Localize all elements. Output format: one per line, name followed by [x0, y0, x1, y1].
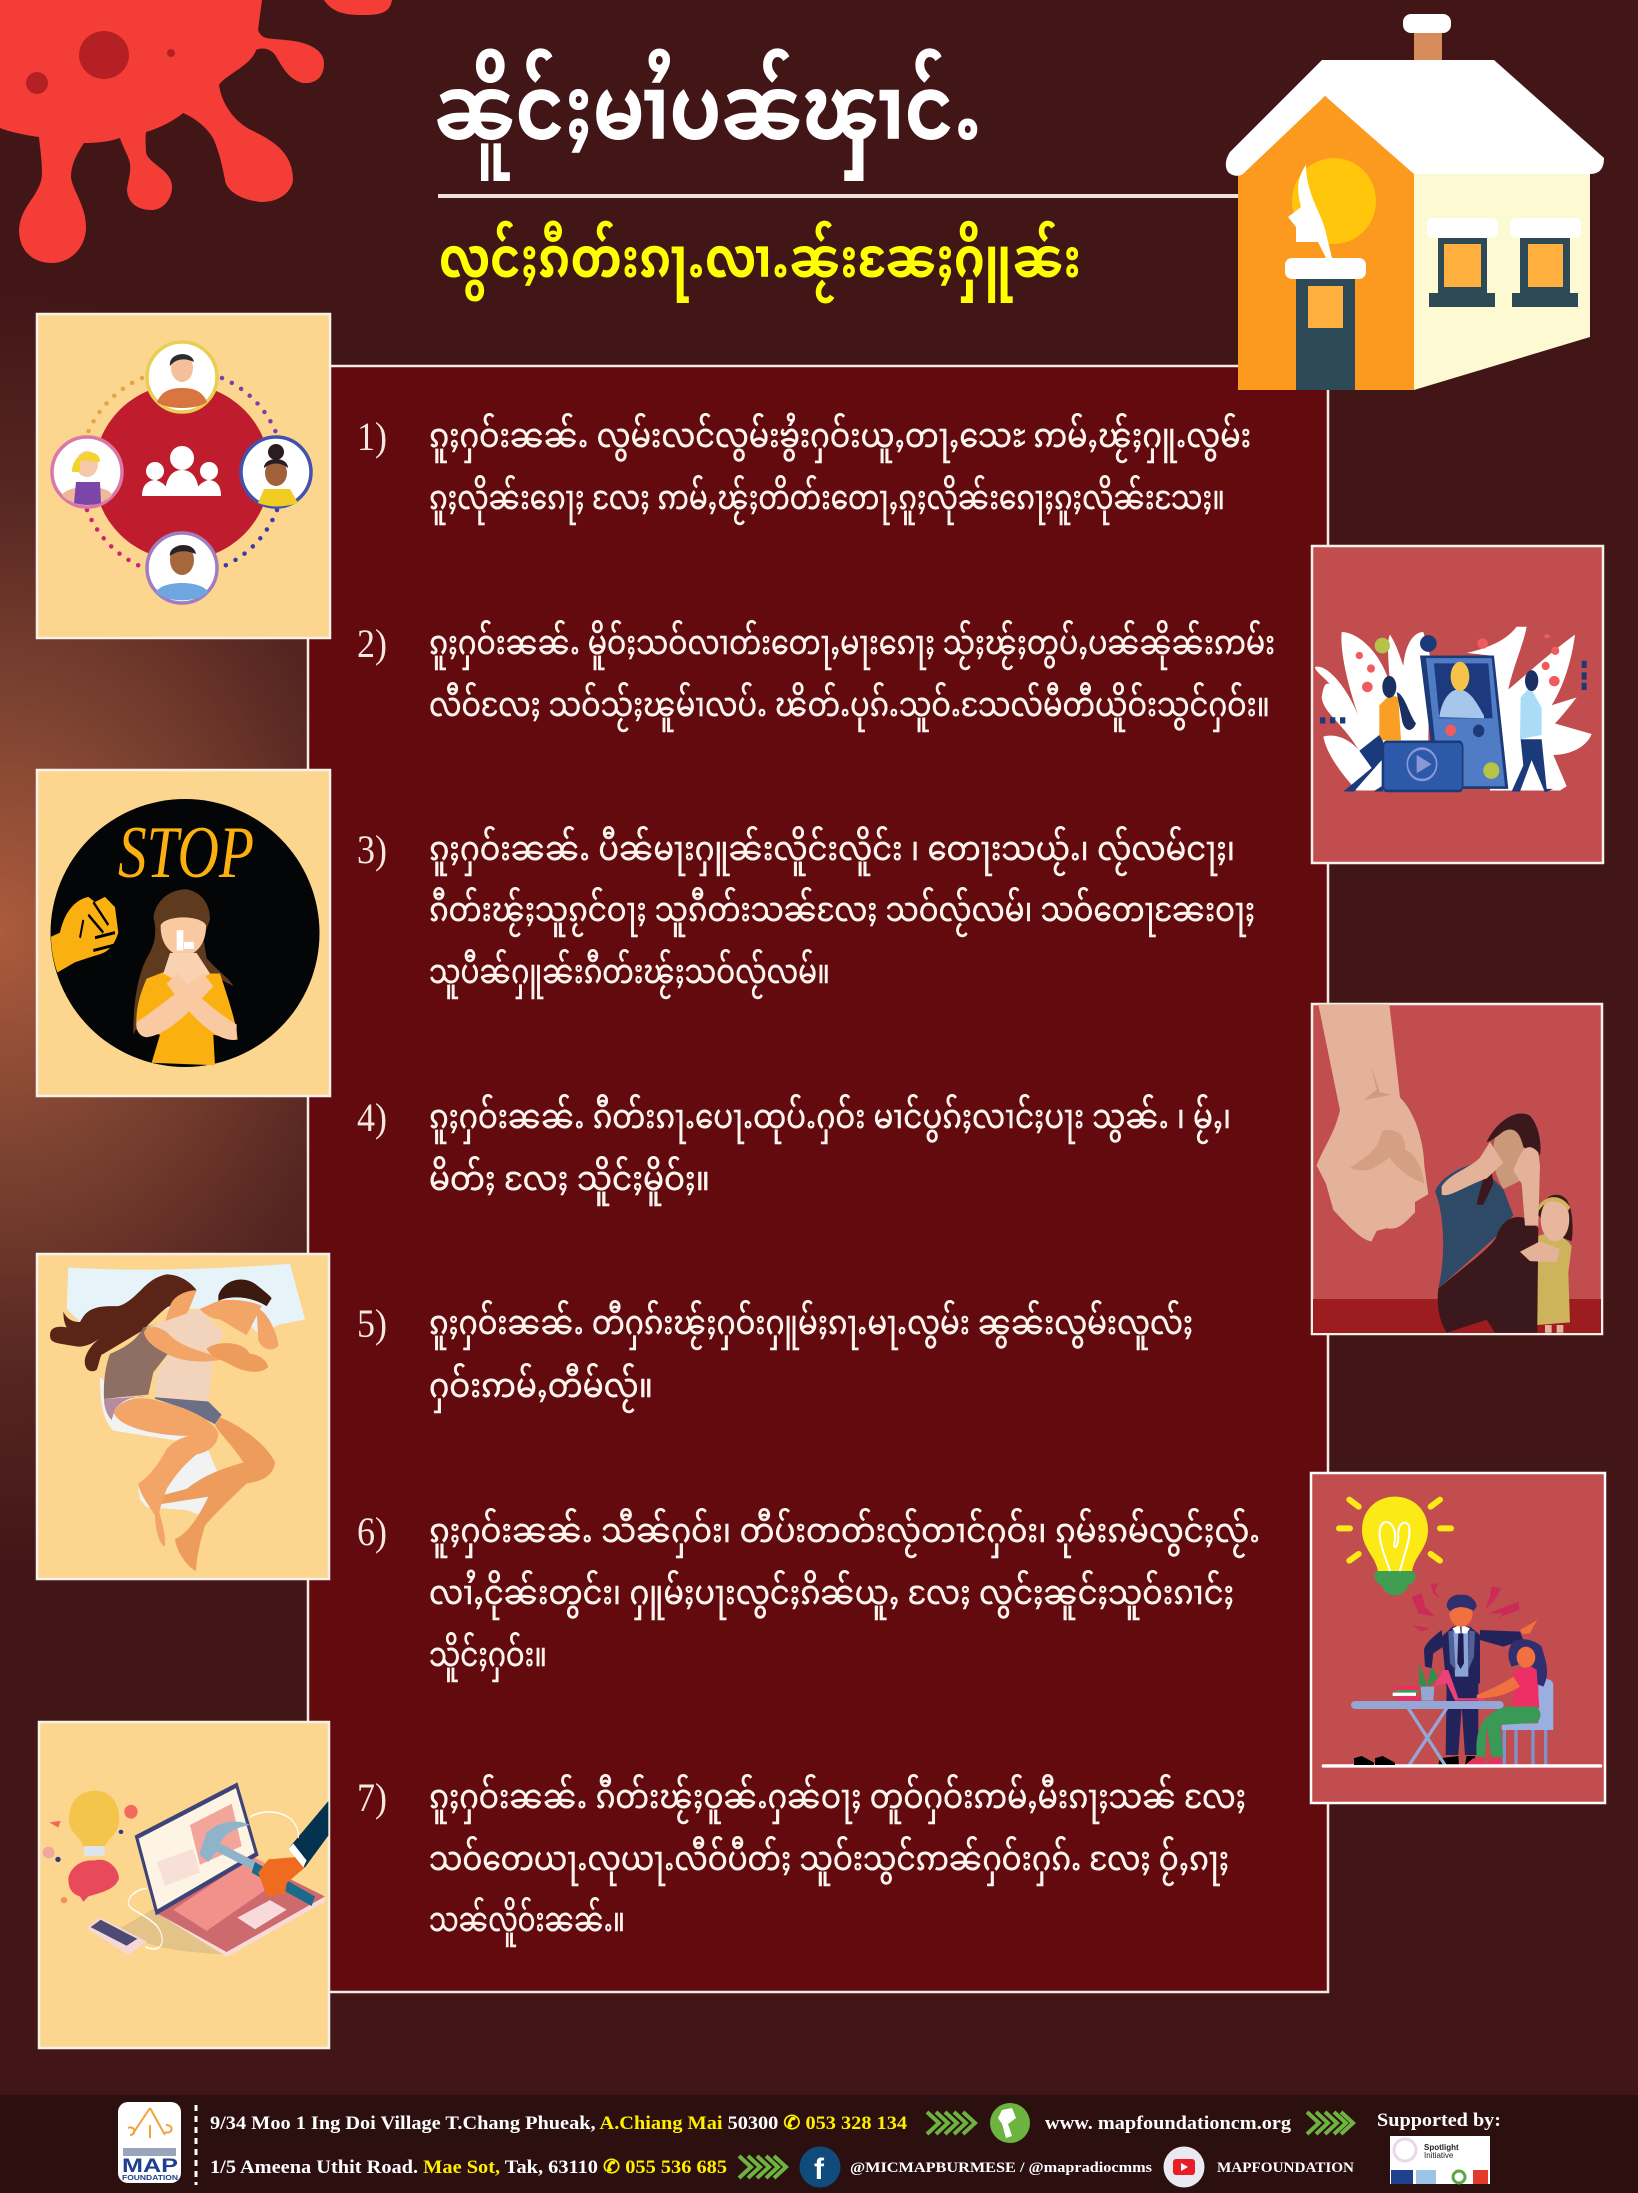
- step 7 text: ၵူႈႁဝ်းၼၼ်ႉ ၵီတ်းၽႂ်ႈဝူၼ်ႉႁၼ်ဝႃႈ တူဝ်ႁဝ်းဢမ်ႇမီးၵႃႈသၼ် လႄႈ: [429, 1772, 1246, 1824]
- step 2 text: ၵူႈႁဝ်းၼၼ်ႉ မိူဝ်ႈသဝ်လၢတ်းတေႃႇမႃးၵေႃႈ သႂ်ႈၽႂ်ႈတွပ်ႇပၼ်ၼိုၼ်းဢမ်း: [429, 618, 1275, 670]
- spotlight initiative logo: Initiative: [1424, 2151, 1454, 2160]
- icon: fist: [51, 897, 118, 972]
- video tablet: [1383, 742, 1463, 791]
- avatar top: [147, 342, 217, 412]
- man shirt: [147, 1309, 223, 1401]
- dotted ring: [87, 378, 277, 567]
- shoes: [1354, 1756, 1395, 1765]
- step 2 text: [357, 618, 1275, 732]
- reaction bubbles: [1320, 634, 1587, 724]
- icon: youtube: [1164, 2146, 1204, 2188]
- icon: globe: [990, 2103, 1030, 2143]
- laptop base: [157, 1854, 325, 1955]
- step 2 text: လီဝ်လႄႈ သဝ်သႂ်ႈၽူမ်ၢလပ်ႉ ၽိတ်ႉပုၵ်ႉသူဝ်ႉသႄလ်မီတီယိူဝ်းသွင်ႁဝ်း။: [429, 680, 1270, 732]
- step 6 text: လၢႆႇငိုၼ်းတွင်း၊ ႁူမ်ႈပႃးလွင်ႈၵိၼ်ယူႇ လႄႈ လွင်ႈၼူင်ႈသူဝ်းၵၢင်ႈ: [429, 1568, 1234, 1620]
- chevrons 1: [927, 2112, 975, 2134]
- panel: people circle illustration: [37, 314, 330, 638]
- bed sheet: [100, 1378, 220, 1531]
- woman arm: [144, 1327, 223, 1361]
- icon: facebook: [800, 2146, 840, 2188]
- panel: hammer on laptop illustration: [39, 1722, 329, 2048]
- youtube name: MAPFOUNDATION: [1217, 2160, 1354, 2176]
- MAP foundation logo: MAP: [122, 2156, 178, 2177]
- man head: [200, 1300, 262, 1335]
- lightning marks: [1412, 1583, 1519, 1632]
- laptop shadow: [120, 1907, 227, 1955]
- man arm: [207, 1343, 268, 1372]
- charging cable: [128, 1812, 298, 1949]
- chevrons 3: [739, 2156, 786, 2178]
- white leaves: [1315, 627, 1592, 790]
- icon: raised fist: [1317, 1004, 1428, 1241]
- address line 2: 1/5 Ameena Uthit Road. Mae Sot, Tak, 63110 ✆ 055 536 685: [210, 2157, 727, 2178]
- icon: lightbulb: [1339, 1497, 1451, 1595]
- left window: [1427, 218, 1498, 307]
- laptop screen: [137, 1785, 257, 1912]
- panel: main text panel: [308, 366, 1328, 1992]
- footer band: [0, 2095, 1638, 2193]
- avatar left: [52, 437, 122, 507]
- step 4 text: [357, 1092, 1231, 1206]
- step 5 text: ႁဝ်းဢမ်ႇတီမ်လႂ်။: [429, 1361, 653, 1413]
- step 2 text: 2): [357, 621, 387, 666]
- panel: fist and frightened family illustration: [1312, 1004, 1602, 1334]
- panel: social media illustration: [1312, 546, 1603, 863]
- step 1 text: 1): [357, 414, 387, 459]
- woman face: [165, 1290, 197, 1322]
- books: [1393, 1686, 1420, 1701]
- step 1 text: ၵူႈႁဝ်းၼၼ်ႉ လွမ်းလင်လွမ်းၶွႆးႁဝ်းယူႇတႃႇသေႊ ဢမ်ႇၽႂ်ႈႁူႉလွမ်း: [429, 411, 1251, 463]
- floor line: [1322, 1764, 1602, 1768]
- supported by: Supported by:: [1377, 2110, 1501, 2131]
- MAP foundation logo: FOUNDATION: [122, 2175, 178, 2182]
- phone: [1420, 656, 1508, 789]
- icon: lightbulb: [69, 1791, 119, 1856]
- laptop: [1433, 1670, 1485, 1701]
- spotlight initiative logo: [1390, 2136, 1490, 2184]
- panel: stop violence illustration: [37, 770, 330, 1096]
- avatar bottom: [147, 533, 217, 603]
- chevrons 2: [1307, 2112, 1353, 2134]
- woman profile: [1288, 165, 1332, 258]
- panel: couple in bed illustration: [37, 1254, 329, 1579]
- MAP foundation logo: [118, 2102, 181, 2183]
- virus splat decoration: [0, 0, 392, 263]
- step 3 text: ၵူႈႁဝ်းၼၼ်ႉ ပီၼ်မႃးႁူၼ်းလိူင်းလိူင်း ၊ တေႃးသယႂ်ႉ၊ လႂ်လမ်ငႃႈ၊: [429, 824, 1235, 876]
- step 7 text: သဝ်တေယႃႉလုယႃႉလီဝ်ပီတ်ႈ သူဝ်းသွင်ဢၼ်ႁဝ်းႁၵ်ႉ လႄႈ ဝႂ်ႇၵႃႈ: [429, 1834, 1229, 1886]
- man shorts: [155, 1397, 222, 1424]
- hammer: [199, 1801, 328, 1906]
- woman legs: [113, 1398, 218, 1546]
- step 6 text: [357, 1506, 1260, 1682]
- step 1 text: [357, 411, 1251, 525]
- right window: [1510, 218, 1581, 307]
- frightened child: [1520, 1195, 1573, 1333]
- house illustration: [1226, 14, 1604, 390]
- step 3 text: သူပီၼ်ႁူၼ်းၵီတ်းၽႂ်ႈသဝ်လႂ်လမ်။: [429, 947, 830, 999]
- avatar right: [241, 437, 311, 507]
- website: www. mapfoundationcm.org: [1045, 2113, 1292, 2134]
- man with phone: [1512, 670, 1553, 793]
- seated woman: [1465, 1639, 1553, 1765]
- woman crying: [133, 889, 238, 1065]
- step 7 text: [357, 1772, 1246, 1947]
- moon behind profile: [1292, 158, 1376, 244]
- stop lettering: STOP: [118, 812, 254, 894]
- step 6 text: 6): [357, 1509, 387, 1554]
- step 3 text: 3): [357, 827, 387, 872]
- icon: brain: [68, 1860, 119, 1902]
- group icon: [142, 446, 221, 496]
- man legs: [157, 1417, 275, 1571]
- social handles: @MICMAPBURMESE / @mapradiocmms: [850, 2160, 1152, 2176]
- door: [1285, 258, 1366, 390]
- floor: [1313, 1299, 1601, 1333]
- step 1 text: ၵူႈလိုၼ်းၵေႃႈ လႄႈ ဢမ်ႇၽႂ်ႈတိတ်းတေႃႇၵူႈလိုၼ်းၵေႃႈၵူႈလိုၼ်းသႄႈ။: [429, 473, 1225, 525]
- angry man: [1424, 1595, 1537, 1765]
- step 6 text: ၵူႈႁဝ်းၼၼ်ႉ သီၼ်ႁဝ်း၊ တီပ်းတတ်းလႂ်တၢင်ႁဝ်း၊ ၵုမ်းၵမ်လွင်ႈလႂ်ႉ: [429, 1506, 1260, 1558]
- title divider line: [438, 194, 1248, 198]
- step 6 text: သိူင်ႈႁဝ်း။: [429, 1630, 547, 1682]
- step 4 text: ၵူႈႁဝ်းၼၼ်ႉ ၵီတ်းၵႃႉပေႃႉထုပ်ႉႁဝ်း မၢင်ပွၵ်ႈလၢင်ႈပႃး သွၼ်ႉ ၊ မႂ်ႇ၊: [429, 1092, 1231, 1144]
- woman with phone: [1343, 676, 1416, 792]
- decorative dots: [43, 1805, 138, 1903]
- spotlight initiative logo: Spotlight: [1424, 2143, 1459, 2152]
- icon: facebook: f: [814, 2153, 825, 2186]
- panel: angry boss illustration: [1311, 1473, 1605, 1803]
- desk: [1351, 1701, 1504, 1765]
- step 4 text: 4): [357, 1095, 387, 1140]
- step 4 text: မိတ်ႈ လႄႈ သိူင်ႈမိူဝ်ႈ။: [429, 1154, 710, 1206]
- address line 1: 9/34 Moo 1 Ing Doi Village T.Chang Phueak, A.Chiang Mai 50300 ✆ 053 328 134: [210, 2113, 908, 2134]
- woman hair: [50, 1274, 197, 1371]
- woman tank top: [104, 1322, 170, 1399]
- step 7 text: 7): [357, 1775, 387, 1820]
- step 5 text: 5): [357, 1301, 387, 1346]
- woman underwear: [104, 1396, 148, 1420]
- subtitle: လွင်ႈၵီတ်းၵႃႉလၢႉၼႂ်းၼႄႈႁိူၼ်း: [439, 220, 1081, 304]
- step 5 text: [357, 1298, 1193, 1413]
- potted plant: [1417, 1663, 1438, 1701]
- stop artwork: [51, 889, 238, 1065]
- step 7 text: သၼ်လိူဝ်းၼၼ်ႉ။: [429, 1895, 625, 1947]
- phone: [86, 1918, 147, 1955]
- step 3 text: ၵီတ်းၽႂ်ႈသူၵႂင်ဝႃႈ သူၵီတ်းသၼ်လႄႈ သဝ်လႂ်လမ်၊ သဝ်တေႃၼႄးဝႃႈ: [429, 885, 1255, 937]
- dashed separator: [194, 2105, 198, 2185]
- title: ၼိူင်ႈမၢႆပၼ်ၾၢင်ႉ: [434, 48, 982, 181]
- frightened woman: [1435, 1113, 1541, 1333]
- step 5 text: ၵူႈႁဝ်းၼၼ်ႉ တီႁၵ်းၽႂ်ႈႁဝ်းႁူမ်ႈၵႃႉမႃႉလွမ်း ၼွၼ်းလွမ်းလူလ်ႈ: [429, 1298, 1193, 1350]
- step 3 text: [357, 824, 1255, 999]
- pillow: [67, 1264, 305, 1335]
